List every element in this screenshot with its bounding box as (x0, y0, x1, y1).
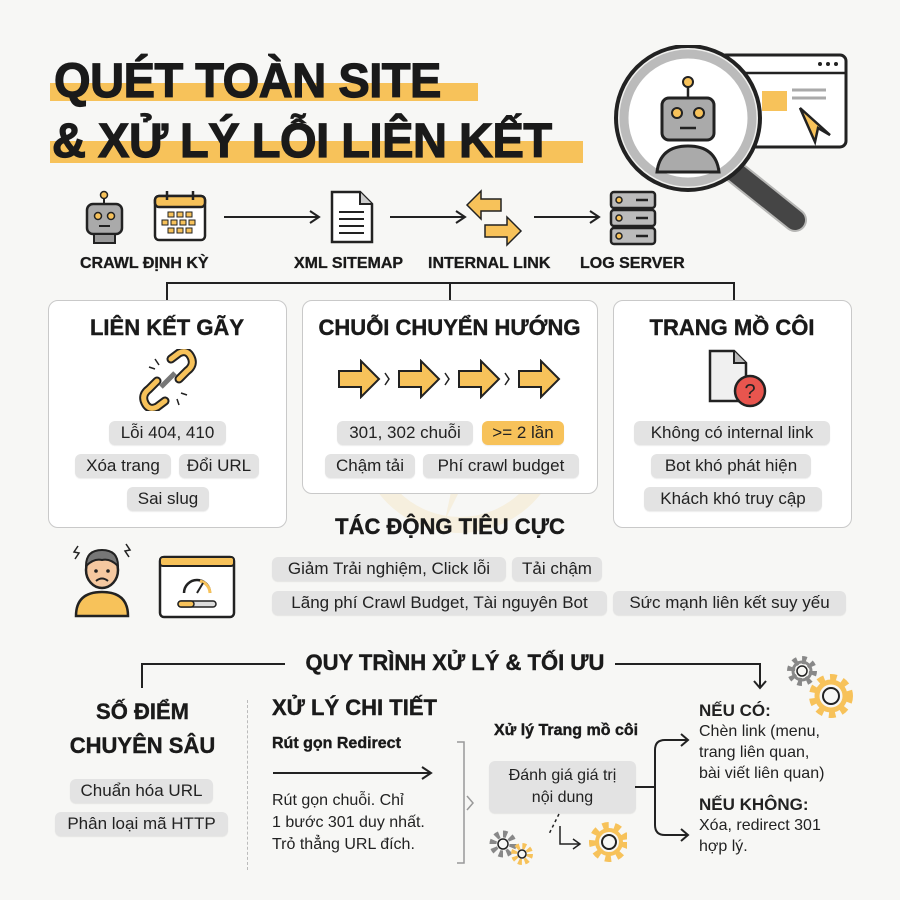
block: nếu có / nếu không: NẾU CÓ: (699, 701, 771, 720)
panel: chuỗi chuyển hướng: 301, 302 chuỗi (349, 423, 461, 442)
flow row: crawl sources: INTERNAL LINK (428, 255, 550, 272)
block: nếu có / nếu không: Xóa, redirect 301 (699, 817, 821, 834)
icon: orphan page (708, 350, 766, 408)
block: xử lý chi tiết: Rút gọn chuỗi. Chỉ (272, 792, 404, 809)
arrow (534, 210, 601, 224)
block: nếu có / nếu không: Chèn link (menu, (699, 723, 820, 740)
panel: liên kết gãy: Xóa trang (86, 456, 160, 475)
branch lines (635, 733, 690, 842)
icon: gears bottom (490, 814, 627, 865)
block: nếu có / nếu không (699, 701, 824, 855)
arrow (390, 210, 467, 224)
impact chips: Sức mạnh liên kết suy yếu (629, 593, 830, 612)
block: số điểm chuyên sâu (55, 698, 228, 837)
heading: tác động tiêu cực: TÁC ĐỘNG TIÊU CỰC (335, 514, 565, 539)
block: nếu có / nếu không: bài viết liên quan) (699, 765, 824, 782)
block: số điểm chuyên sâu: SỐ ĐIỂM (96, 699, 189, 724)
impact chips (272, 557, 846, 616)
arrow (224, 210, 321, 224)
panel: trang mồ côi: Khách khó truy cập (660, 489, 806, 508)
block: xử lý chi tiết: XỬ LÝ CHI TIẾT (272, 695, 437, 720)
panel: liên kết gãy: LIÊN KẾT GÃY (90, 315, 244, 340)
panel: chuỗi chuyển hướng: >= 2 lần (492, 423, 554, 442)
block: xử lý chi tiết: Rút gọn Redirect (272, 735, 401, 752)
block: xử lý trang mồ côi: Xử lý Trang mồ côi (494, 722, 638, 739)
icon: slow browser (158, 556, 236, 618)
impact chips: Giảm Trải nghiệm, Click lỗi (288, 559, 490, 578)
icon: broken chain (139, 349, 197, 411)
label row: CRAWL ĐỊNH KỲ (80, 255, 209, 272)
icon: document (330, 190, 374, 244)
panel: trang mồ côi: TRANG MỒ CÔI (650, 315, 814, 340)
bracket (457, 741, 474, 864)
panel: liên kết gãy: Sai slug (138, 489, 198, 508)
icon: calendar (154, 191, 206, 242)
divider dashed (247, 700, 248, 870)
icon: stressed person (72, 544, 132, 618)
flow row: crawl sources: LOG SERVER (580, 255, 685, 272)
connector tree (166, 282, 735, 300)
icon: redirect arrows (338, 359, 560, 399)
title: QUÉT TOÀN SITE (54, 55, 441, 108)
block: nếu có / nếu không: hợp lý. (699, 838, 748, 855)
icon: server (610, 190, 656, 246)
process connector (141, 663, 767, 690)
title: & XỬ LÝ LỖI LIÊN KẾT (52, 115, 552, 168)
block: xử lý chi tiết (272, 694, 437, 853)
block: nếu có / nếu không: trang liên quan, (699, 744, 809, 761)
block: xử lý trang mồ côi: nội dung (532, 789, 593, 806)
block: xử lý trang mồ côi: Đánh giá giá trị (509, 767, 616, 784)
icon: robot (86, 190, 124, 244)
panel: chuỗi chuyển hướng: CHUỖI CHUYỂN HƯỚNG (319, 315, 580, 340)
panel: liên kết gãy: Đổi URL (187, 456, 251, 475)
panel: trang mồ côi: Bot khó phát hiện (665, 456, 797, 475)
icon: magnifier with robot (614, 45, 848, 232)
block: xử lý trang mồ côi (489, 722, 690, 865)
block: xử lý chi tiết: Trỏ thẳng URL đích. (272, 836, 415, 853)
heading: quy trình xử lý: QUY TRÌNH XỬ LÝ & TỐI ƯU (306, 650, 604, 675)
block: nếu có / nếu không: NẾU KHÔNG: (699, 795, 809, 814)
block: số điểm chuyên sâu: Chuẩn hóa URL (81, 781, 202, 800)
icon: swap arrows (466, 189, 522, 247)
impact chips: Lãng phí Crawl Budget, Tài nguyên Bot (291, 593, 588, 612)
block: số điểm chuyên sâu: Phân loại mã HTTP (67, 814, 216, 833)
flow row: crawl sources: XML SITEMAP (294, 255, 403, 272)
panel: liên kết gãy: Lỗi 404, 410 (121, 423, 214, 442)
panel: chuỗi chuyển hướng: Phí crawl budget (438, 456, 564, 475)
panel: trang mồ côi: Không có internal link (651, 423, 813, 442)
impact chips: Tải chậm (522, 559, 592, 578)
icon: gears top (787, 656, 853, 718)
panel: chuỗi chuyển hướng (302, 300, 598, 494)
panel: chuỗi chuyển hướng: Chậm tải (336, 456, 404, 475)
panel: liên kết gãy (48, 300, 287, 528)
icon: orphan page: ? (744, 381, 756, 403)
block: số điểm chuyên sâu: CHUYÊN SÂU (70, 733, 215, 758)
watermark (380, 494, 540, 533)
title (50, 54, 583, 168)
block: xử lý chi tiết: 1 bước 301 duy nhất. (272, 814, 425, 831)
flow row: crawl sources (80, 189, 685, 272)
panel: trang mồ côi (613, 300, 852, 528)
